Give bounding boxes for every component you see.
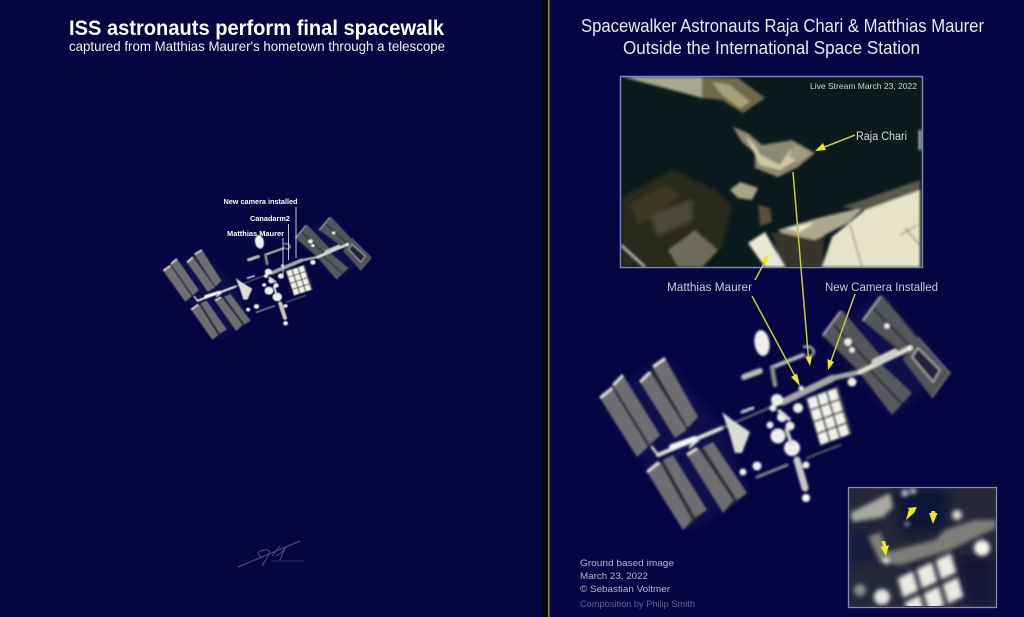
left title: captured from Matthias Maurer's hometown through a telescope <box>69 38 445 54</box>
inset caption: Live Stream March 23, 2022 <box>810 81 917 91</box>
labels on large image <box>667 282 938 294</box>
ISS telescope image, small <box>163 217 371 340</box>
zoomed inset photo <box>848 488 996 617</box>
image credits: March 23, 2022 <box>580 571 648 582</box>
labels on large image: Matthias Maurer <box>667 282 752 294</box>
background: left panel <box>0 0 541 617</box>
panel divider <box>541 0 550 617</box>
image credits: © Sebastian Voltmer <box>580 584 670 595</box>
right title: Spacewalker Astronauts Raja Chari & Matthias Maurer <box>581 16 984 36</box>
left annotations: Canadarm2 <box>250 214 290 223</box>
inset arrows <box>880 507 938 556</box>
image credits: Composition by Philip Smith <box>580 599 695 610</box>
label: Raja Chari: Raja Chari <box>856 131 907 143</box>
ISS telescope image, large <box>600 295 950 530</box>
left annotations <box>224 197 298 278</box>
left annotations: Matthias Maurer <box>227 229 284 238</box>
image credits: Ground based image <box>580 558 674 569</box>
background: right panel <box>549 0 1024 617</box>
image credits <box>580 558 695 610</box>
right title <box>581 16 984 58</box>
yellow arrows <box>752 135 855 386</box>
live stream photo inset <box>620 76 922 268</box>
signature <box>238 541 304 567</box>
left title <box>69 17 445 54</box>
left annotations: New camera installed <box>224 197 298 206</box>
right title: Outside the International Space Station <box>623 38 920 58</box>
left title: ISS astronauts perform final spacewalk <box>69 17 444 40</box>
labels on large image: New Camera Installed <box>825 282 938 294</box>
